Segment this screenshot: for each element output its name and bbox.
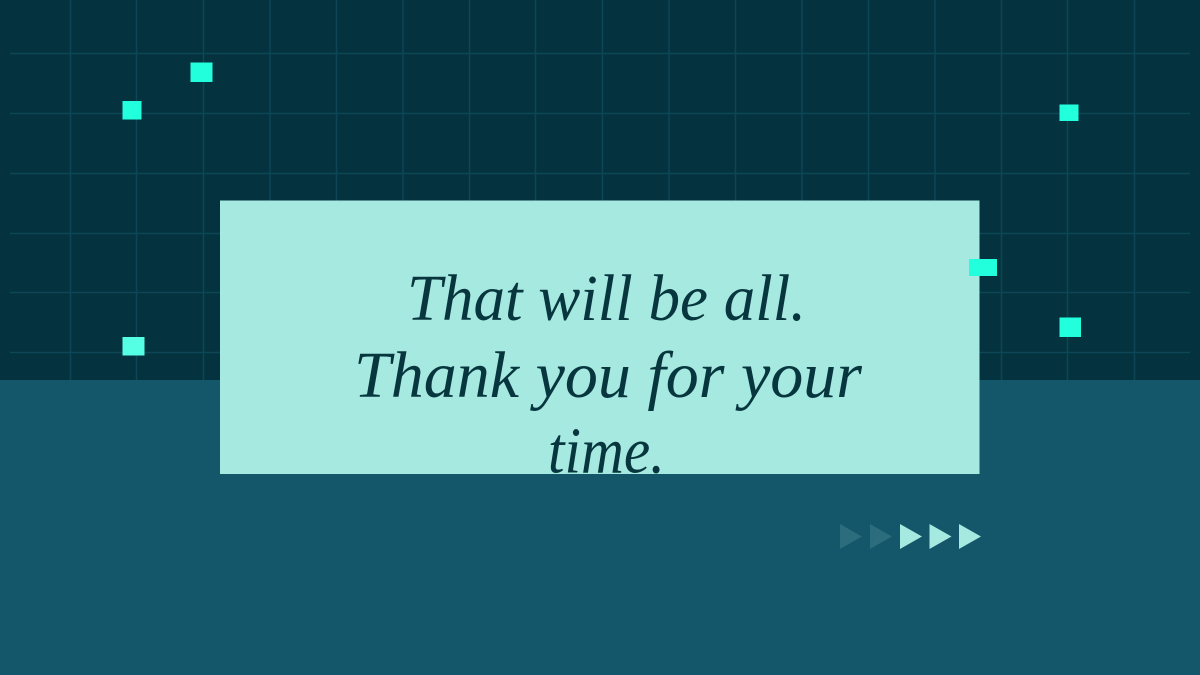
closing message: time. xyxy=(548,414,665,488)
arrow 3 xyxy=(900,524,922,549)
arrow 4 xyxy=(930,524,952,549)
arrow row xyxy=(840,524,981,549)
accent square 2 xyxy=(190,62,212,82)
accent square 3 xyxy=(1060,104,1078,121)
closing message xyxy=(354,262,862,488)
accent square 1 xyxy=(122,101,142,120)
accent square 5 xyxy=(1060,318,1081,337)
closing message: Thank you for your xyxy=(354,339,862,412)
accent square 6 xyxy=(122,337,144,356)
message card xyxy=(220,200,980,488)
faded arrow 1 xyxy=(840,524,862,549)
faded arrow 2 xyxy=(870,524,892,549)
closing message: That will be all. xyxy=(407,262,806,335)
arrow 5 xyxy=(959,524,981,549)
lower teal band xyxy=(0,380,1200,675)
accent square 4 xyxy=(969,259,997,276)
